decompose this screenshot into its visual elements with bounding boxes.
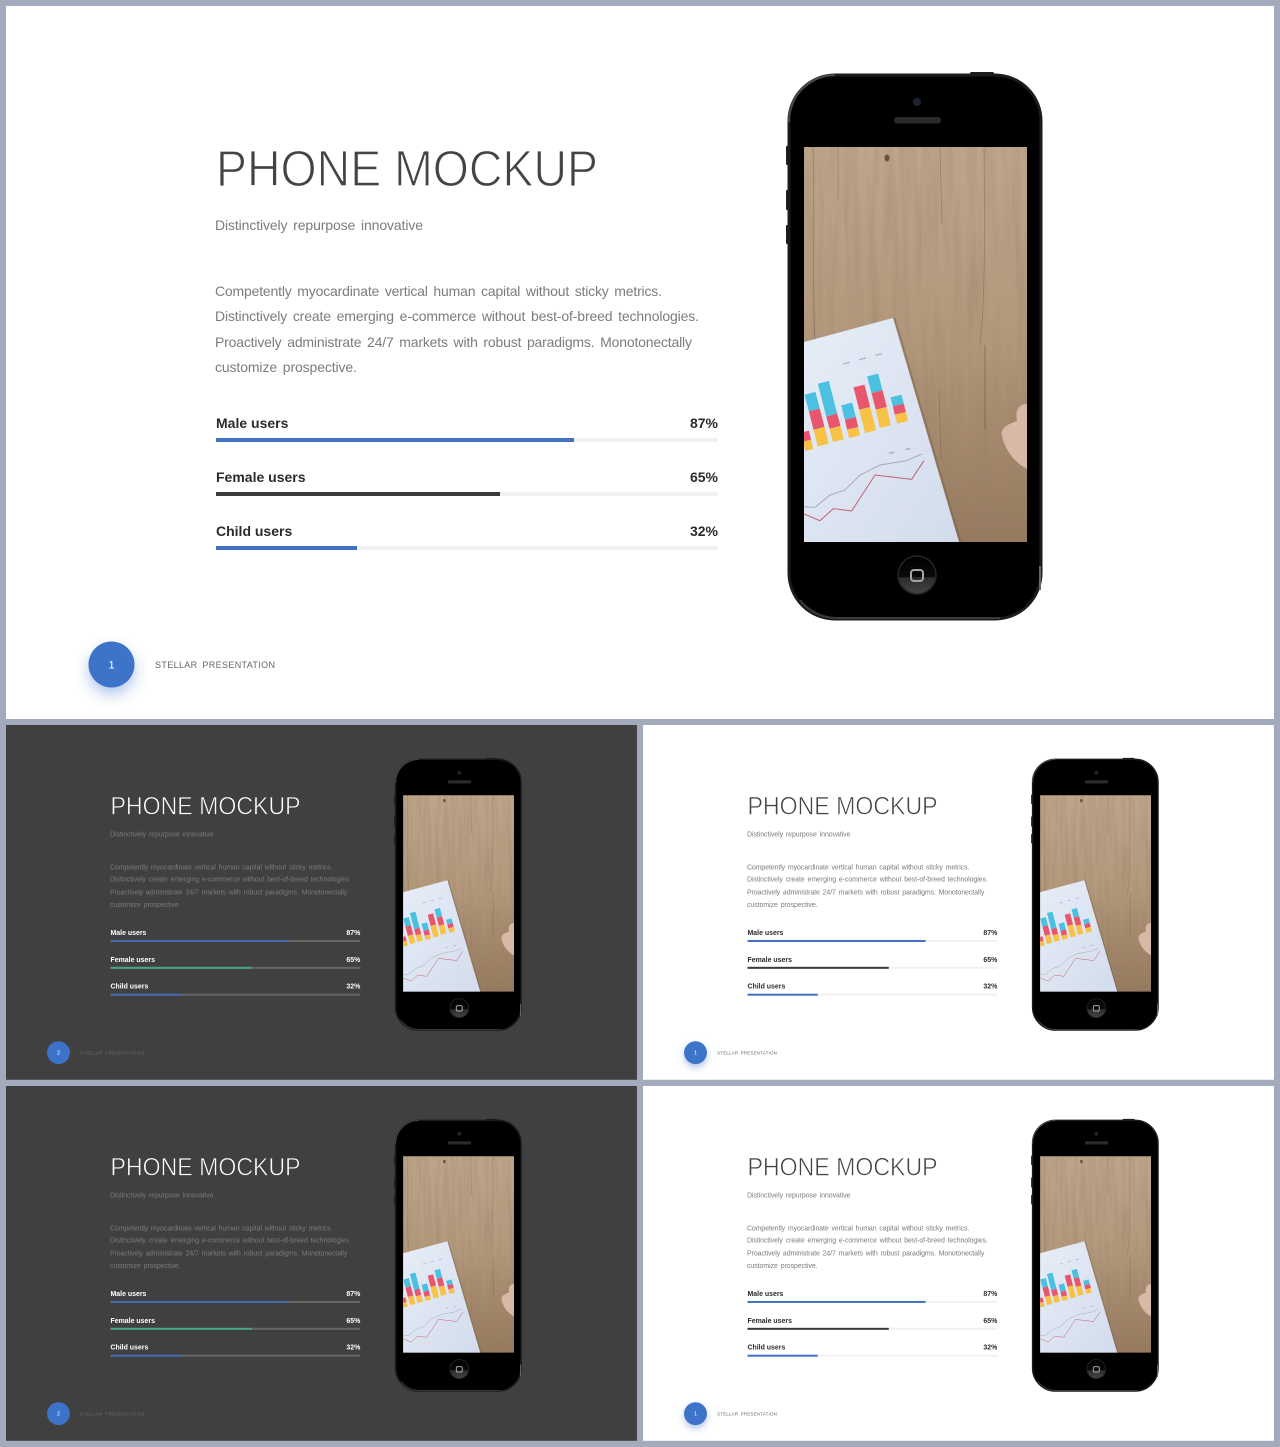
progress: male users: Male users <box>110 930 147 937</box>
footer: STELLAR PRESENTATION <box>717 1411 777 1416</box>
body text: Distinctively create emerging e-commerce without best-of-breed technologies. <box>110 877 351 884</box>
footer: STELLAR PRESENTATION <box>80 1050 144 1055</box>
progress: child users <box>110 984 360 996</box>
footer <box>47 1402 144 1425</box>
slide background <box>643 1086 1274 1441</box>
progress: male users <box>216 415 719 442</box>
progress: male users: Male users <box>216 415 289 431</box>
title: PHONE MOCKUP <box>110 793 301 821</box>
panel: dark slide top left <box>6 725 637 1080</box>
body text: Competently myocardinate vertical human capital without sticky metrics. <box>110 864 332 871</box>
progress: male users: Male users <box>747 930 784 937</box>
footer <box>88 642 275 688</box>
slide background <box>6 725 637 1080</box>
progress: male users: 87% <box>690 415 719 431</box>
slide background <box>643 725 1274 1080</box>
progress: male users <box>110 930 360 942</box>
subtitle: Distinctively repurpose innovative <box>747 831 851 838</box>
progress: female users: 65% <box>346 1318 360 1325</box>
body text: Distinctively create emerging e-commerce without best-of-breed technologies. <box>747 1238 988 1245</box>
progress: child users: Child users <box>110 1345 148 1352</box>
progress: male users: Male users <box>747 1291 784 1298</box>
progress: child users: 32% <box>983 984 997 991</box>
subtitle: Distinctively repurpose innovative <box>110 831 214 838</box>
body text: customize prospective. <box>747 1263 818 1270</box>
footer: 1 <box>694 1051 697 1057</box>
body text <box>110 864 351 909</box>
progress: female users: Female users <box>110 957 155 964</box>
body text: Competently myocardinate vertical human capital without sticky metrics. <box>110 1225 332 1232</box>
footer <box>684 1041 777 1064</box>
body text: Competently myocardinate vertical human capital without sticky metrics. <box>215 283 662 299</box>
progress: female users <box>747 1318 997 1330</box>
progress: child users <box>216 523 719 550</box>
subtitle: Distinctively repurpose innovative <box>747 1192 851 1199</box>
progress: female users <box>747 957 997 969</box>
body text: customize prospective. <box>215 359 357 375</box>
panel: white slide bottom right <box>643 1086 1274 1441</box>
phone mockup <box>786 72 1041 619</box>
footer <box>684 1402 777 1425</box>
progress: male users: 87% <box>983 1291 997 1298</box>
body text <box>110 1225 351 1270</box>
body text <box>747 1225 988 1270</box>
slide background <box>6 6 1274 719</box>
title: PHONE MOCKUP <box>747 1154 938 1182</box>
phone mockup <box>1031 1119 1158 1391</box>
progress: female users: 65% <box>346 957 360 964</box>
panel: dark slide bottom left <box>6 1086 637 1441</box>
progress: child users: Child users <box>747 1345 785 1352</box>
body text: Competently myocardinate vertical human capital without sticky metrics. <box>747 864 969 871</box>
progress: male users: 87% <box>346 1291 360 1298</box>
footer <box>47 1041 144 1064</box>
title: PHONE MOCKUP <box>747 793 938 821</box>
progress: female users: Female users <box>216 469 306 485</box>
progress: child users: 32% <box>346 1345 360 1352</box>
progress: female users: 65% <box>690 469 719 485</box>
progress: female users <box>110 957 360 969</box>
body text <box>215 283 699 375</box>
body text: Proactively administrate 24/7 markets with robust paradigms. Monotonectally <box>747 890 985 897</box>
title: PHONE MOCKUP <box>216 140 598 197</box>
progress: child users: Child users <box>110 984 148 991</box>
phone mockup <box>394 758 521 1030</box>
progress: female users: 65% <box>983 957 997 964</box>
footer: 2 <box>57 1051 60 1057</box>
body text: Proactively administrate 24/7 markets with robust paradigms. Monotonectally <box>110 1251 348 1258</box>
body text: Distinctively create emerging e-commerce without best-of-breed technologies. <box>747 877 988 884</box>
footer: 1 <box>108 660 115 672</box>
progress: child users: Child users <box>216 523 292 539</box>
slide background <box>6 1086 637 1441</box>
body text <box>747 864 988 909</box>
footer: STELLAR PRESENTATION <box>155 660 275 670</box>
progress: male users: Male users <box>110 1291 147 1298</box>
body text: Proactively administrate 24/7 markets with robust paradigms. Monotonectally <box>110 890 348 897</box>
progress: male users <box>747 1291 997 1303</box>
body text: customize prospective. <box>747 902 818 909</box>
footer: 2 <box>57 1412 60 1418</box>
progress: female users <box>216 469 719 496</box>
panel: large white slide <box>6 6 1274 719</box>
progress: female users <box>110 1318 360 1330</box>
progress: male users <box>110 1291 360 1303</box>
progress: child users: 32% <box>346 984 360 991</box>
body text: customize prospective. <box>110 1263 181 1270</box>
progress: female users: 65% <box>983 1318 997 1325</box>
title: PHONE MOCKUP <box>110 1154 301 1182</box>
footer: STELLAR PRESENTATION <box>80 1411 144 1416</box>
phone mockup <box>394 1119 521 1391</box>
progress: female users: Female users <box>747 1318 792 1325</box>
progress: male users <box>747 930 997 942</box>
progress: child users: Child users <box>747 984 785 991</box>
progress: child users <box>747 1345 997 1357</box>
progress: male users: 87% <box>346 930 360 937</box>
subtitle: Distinctively repurpose innovative <box>215 217 423 233</box>
progress: child users <box>747 984 997 996</box>
progress: female users: Female users <box>747 957 792 964</box>
subtitle: Distinctively repurpose innovative <box>110 1192 214 1199</box>
progress: male users: 87% <box>983 930 997 937</box>
phone mockup <box>1031 758 1158 1030</box>
footer: STELLAR PRESENTATION <box>717 1050 777 1055</box>
body text: customize prospective. <box>110 902 181 909</box>
body text: Competently myocardinate vertical human capital without sticky metrics. <box>747 1225 969 1232</box>
body text: Distinctively create emerging e-commerce without best-of-breed technologies. <box>110 1238 351 1245</box>
footer: 1 <box>694 1412 697 1418</box>
body text: Proactively administrate 24/7 markets with robust paradigms. Monotonectally <box>215 334 692 350</box>
body text: Distinctively create emerging e-commerce without best-of-breed technologies. <box>215 308 699 324</box>
progress: child users: 32% <box>983 1345 997 1352</box>
progress: female users: Female users <box>110 1318 155 1325</box>
progress: child users: 32% <box>690 523 719 539</box>
body text: Proactively administrate 24/7 markets with robust paradigms. Monotonectally <box>747 1251 985 1258</box>
panel: white slide top right <box>643 725 1274 1080</box>
progress: child users <box>110 1345 360 1357</box>
